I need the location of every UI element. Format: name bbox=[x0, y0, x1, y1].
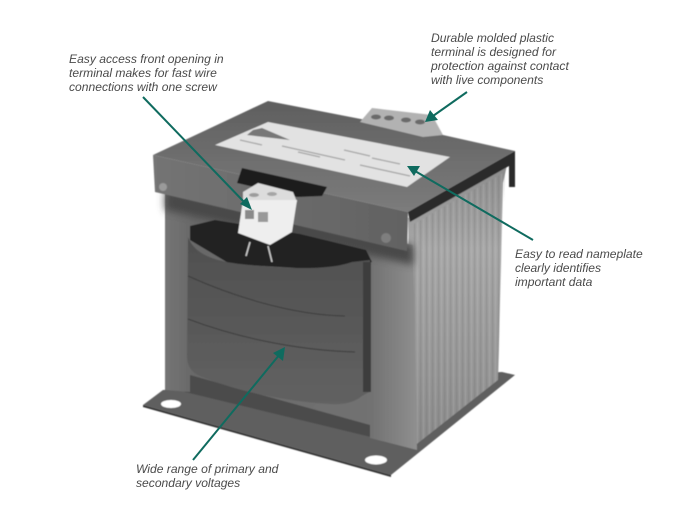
callout: molded terminal: terminal is designed for bbox=[431, 45, 557, 59]
arrow: back terminal bbox=[425, 92, 467, 122]
callout: voltages: secondary voltages bbox=[136, 476, 240, 490]
base plate bbox=[143, 372, 515, 477]
callout: nameplate: Easy to read nameplate bbox=[515, 247, 643, 261]
arrow: nameplate bbox=[407, 166, 533, 240]
callout: molded terminal: with live components bbox=[431, 73, 543, 87]
coil top windings bbox=[190, 220, 372, 270]
callout: voltages: Wide range of primary and bbox=[136, 462, 280, 476]
arrow: coil bbox=[193, 347, 285, 460]
coil bbox=[187, 237, 371, 404]
arrow: front opening bbox=[143, 97, 252, 210]
nameplate bbox=[215, 122, 450, 187]
back terminal bbox=[360, 108, 443, 137]
cover side edge bbox=[408, 151, 515, 222]
front frame bbox=[165, 190, 417, 450]
transformer photo bbox=[143, 101, 515, 477]
callout: front opening: connections with one screw bbox=[69, 80, 218, 94]
callout: front opening: terminal makes for fast wire bbox=[69, 66, 217, 80]
callout: molded terminal: protection against contact bbox=[430, 59, 569, 73]
callout: front opening: Easy access front opening in bbox=[69, 52, 224, 66]
laminated side panel bbox=[408, 165, 507, 447]
cover front bbox=[153, 155, 408, 251]
callout: nameplate: important data bbox=[515, 275, 593, 289]
callout: molded terminal: Durable molded plastic bbox=[431, 31, 554, 45]
cover top bbox=[153, 101, 515, 212]
front terminal bbox=[238, 183, 297, 262]
callout: nameplate: clearly identifies bbox=[515, 261, 601, 275]
